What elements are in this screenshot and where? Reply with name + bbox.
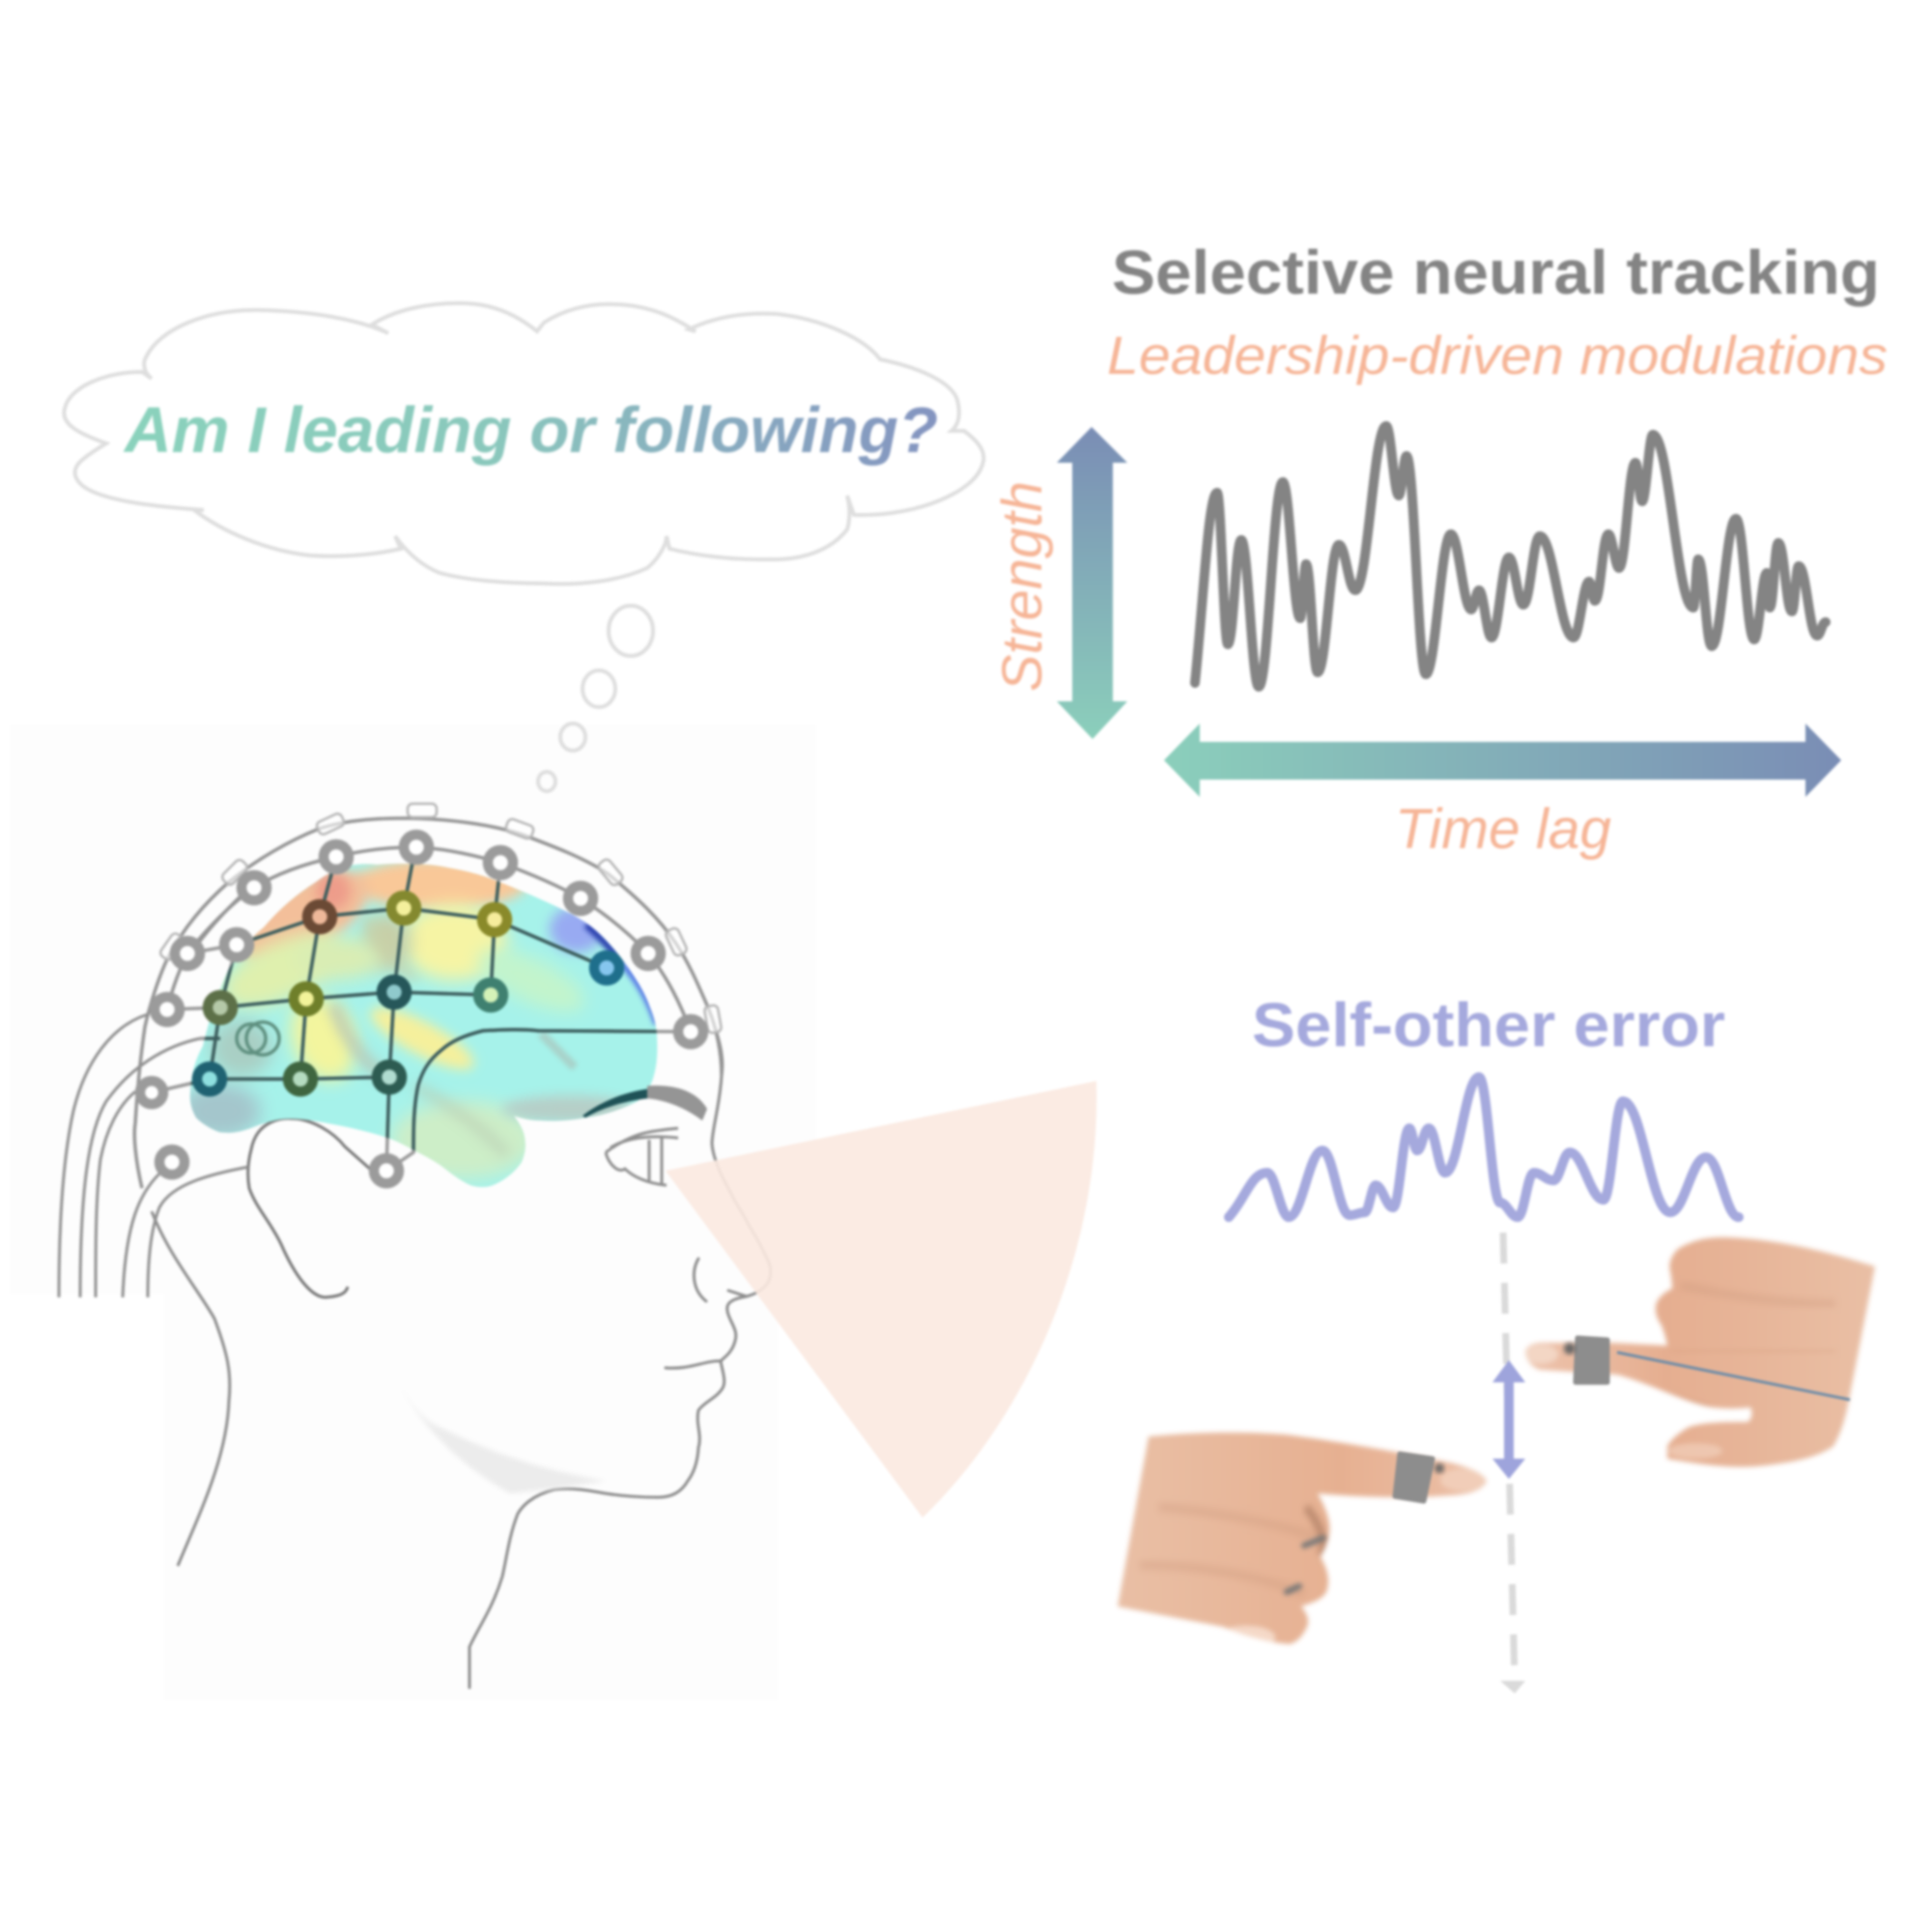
left hand with finger sensor <box>1111 1425 1497 1652</box>
view cone from the eye <box>666 1081 1096 1518</box>
EEG electrodes <box>140 835 703 1183</box>
error distance double arrow <box>1492 1360 1525 1479</box>
dashed alignment line <box>1500 1233 1525 1693</box>
question text: Am I leading or following? <box>123 394 938 467</box>
time lag label: Time lag <box>1395 798 1611 861</box>
ear and jaw line <box>248 1119 370 1297</box>
strength axis arrow <box>1057 427 1127 739</box>
neural tracking waveform <box>1195 426 1826 687</box>
time lag axis arrow <box>1164 724 1841 797</box>
double-ring electrode <box>237 1022 279 1055</box>
strength label: Strength <box>991 481 1054 692</box>
eyebrow <box>582 1086 707 1121</box>
thought bubbles <box>538 606 653 791</box>
face contour <box>469 1008 771 1688</box>
heading: selective neural tracking: Selective neural tracking <box>1112 238 1880 307</box>
subheading: leadership-driven modulations: Leadership-driven modulations <box>1107 325 1888 385</box>
EEG cap grid lines: grey outside the brain <box>152 847 691 1171</box>
EEG cap tabs <box>158 804 722 1034</box>
back of neck <box>152 1211 230 1566</box>
mouth and nostril lines <box>666 1259 721 1368</box>
eye <box>606 1128 678 1185</box>
brain activation map <box>188 862 659 1188</box>
heading: self-other error: Self-other error <box>1252 990 1725 1060</box>
thought cloud <box>64 303 983 583</box>
EEG cap arcs <box>134 818 722 1188</box>
right hand with finger sensor <box>1522 1235 1878 1470</box>
infographic illustration <box>56 247 1888 1693</box>
neck shadow <box>399 1384 606 1493</box>
EEG cap grid lines: dark over the brain <box>189 863 659 1151</box>
EEG wires <box>59 1014 248 1297</box>
self-other error waveform <box>1229 1077 1739 1217</box>
